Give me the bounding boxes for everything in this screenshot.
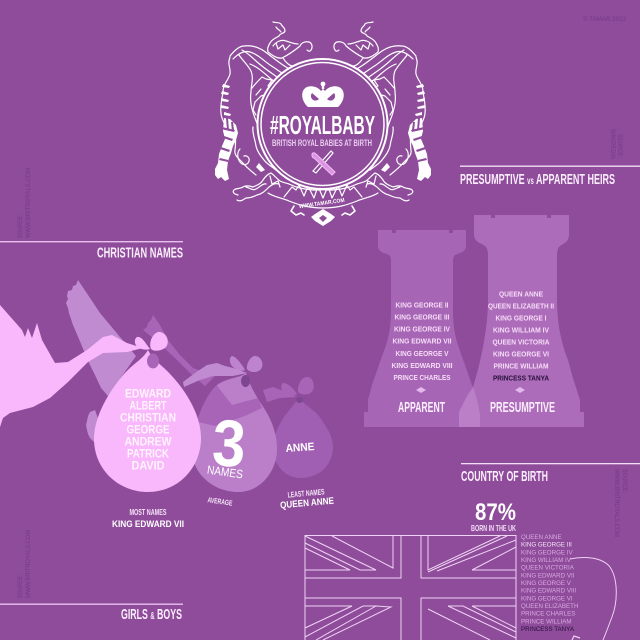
website on ribbon: WWW.TAMAR.COM: [299, 198, 345, 210]
caption: born in the uk: BORN IN THE UK: [471, 523, 517, 533]
list: country of birth names: KING EDWARD VII: [521, 572, 575, 579]
names list: [120, 386, 176, 472]
list: country of birth names: KING GEORGE VI: [521, 595, 573, 602]
heading: girls and boys: GIRLS & BOYS: [121, 606, 182, 623]
source: britroyals top: [17, 168, 32, 238]
crest ornaments, right: [318, 22, 431, 226]
list: country of birth names: [521, 534, 578, 633]
names: presumptive: QUEEN ELIZABETH II: [488, 302, 554, 311]
bag: most names: [94, 332, 201, 492]
list: country of birth names: QUEEN VICTORIA: [521, 565, 575, 572]
list: country of birth names: PRINCE CHARLES: [521, 611, 575, 618]
source: wikipedia: SOURCE:: [616, 134, 623, 158]
names: apparent: [392, 301, 452, 382]
label: king edward vii: KING EDWARD VII: [112, 519, 184, 529]
list: country of birth names: QUEEN ANNE: [521, 534, 562, 541]
subtitle: BRITISH ROYAL BABIES AT BIRTH: [272, 138, 372, 149]
stork: foreground: [0, 305, 143, 427]
names: apparent: PRINCE CHARLES: [394, 373, 450, 382]
source: britroyals right: [613, 469, 628, 537]
label: most names: MOST NAMES: [130, 508, 167, 517]
source: britroyals bottom: SOURCE:: [17, 574, 24, 598]
icon: diamond ornament: [416, 387, 426, 393]
names: apparent: KING GEORGE II: [396, 301, 448, 310]
source: britroyals top: WWW.BRITROYALS.COM: [25, 168, 32, 238]
names: presumptive: QUEEN VICTORIA: [492, 338, 550, 347]
names: apparent: KING GEORGE III: [394, 313, 450, 322]
stork: middle tail: [86, 410, 101, 445]
names: presumptive: KING GEORGE I: [496, 314, 546, 323]
arrow: william iv curve: [570, 558, 616, 640]
rook: presumptive: [459, 215, 584, 427]
icon: diamond ornament: [515, 387, 525, 393]
crest ornaments, left: [215, 22, 328, 226]
headline: #ROYALBABY: [270, 110, 375, 140]
names: presumptive: KING WILLIAM IV: [493, 326, 550, 335]
names: apparent: KING EDWARD VIII: [392, 361, 452, 370]
names: apparent: KING GEORGE V: [396, 349, 449, 358]
names list: GEORGE: [126, 422, 170, 436]
heading: christian names: CHRISTIAN NAMES: [97, 244, 183, 262]
badge rings: [258, 59, 388, 189]
source: britroyals bottom: [17, 530, 32, 598]
source: britroyals bottom: WWW.BRITROYALS.COM: [25, 530, 32, 598]
union jack flag outline: [305, 536, 516, 640]
copyright: © TAMAR 2013: [583, 15, 626, 23]
rook: apparent: [364, 230, 480, 427]
knot: [147, 354, 159, 368]
label: presumptive: PRESUMPTIVE: [490, 399, 555, 416]
names list: ANDREW: [124, 434, 172, 448]
bag: average: [190, 356, 277, 492]
label: anne: ANNE: [285, 441, 315, 455]
icon: crown: [302, 82, 344, 107]
list: country of birth names: PRINCE WILLIAM: [521, 618, 572, 625]
source: britroyals top: SOURCE:: [17, 214, 24, 238]
label: average: AVERAGE: [207, 495, 233, 508]
names: presumptive: QUEEN ANNE: [499, 290, 543, 299]
rook base overlap: [459, 387, 480, 427]
stork: third neck: [263, 387, 297, 402]
heading: country of birth: COUNTRY OF BIRTH: [461, 468, 548, 485]
names: presumptive: KING GEORGE VI: [493, 350, 549, 359]
crest emblem: [215, 22, 431, 226]
label: apparent: APPARENT: [398, 399, 445, 416]
bow: [135, 332, 168, 351]
label: queen anne: QUEEN ANNE: [280, 496, 334, 511]
list: country of birth names: KING GEORGE IV: [521, 549, 573, 556]
names list: ALBERT: [130, 398, 167, 412]
label: least names: LEAST NAMES: [287, 487, 325, 500]
list: country of birth names: QUEEN ELIZABETH: [521, 603, 578, 610]
list: country of birth names: KING GEORGE III: [521, 542, 572, 549]
names: presumptive: PRINCESS TANYA: [493, 374, 549, 383]
knot: [296, 397, 303, 403]
stork: back wing: [143, 315, 215, 386]
big number 3: 3: [211, 405, 248, 481]
names: presumptive: [488, 290, 554, 383]
names: apparent: KING GEORGE IV: [394, 325, 451, 334]
bag: least names: [273, 377, 333, 478]
icon: safety pins: [312, 151, 335, 175]
list: country of birth names: KING GEORGE V: [521, 580, 572, 587]
third stork body: [198, 386, 262, 426]
names: presumptive: PRINCE WILLIAM: [494, 362, 548, 371]
chart: apparent and presumptive rooks: [364, 215, 584, 427]
chart: storks and name bags: [0, 280, 334, 529]
names list: EDWARD: [125, 386, 171, 400]
names list: CHRISTIAN: [120, 410, 176, 424]
list: country of birth names: PRINCESS TANYA: [521, 626, 575, 633]
list: country of birth names: KING WILLIAM IV: [521, 557, 572, 564]
names: apparent: KING EDWARD VII: [392, 337, 452, 346]
knot: [241, 375, 250, 387]
stork: second neck: [183, 363, 247, 387]
source url: wikipedia: WIKIPEDIA: [609, 129, 616, 160]
source: britroyals right: SOURCE:: [621, 469, 628, 493]
names list: PATRICK: [127, 446, 169, 460]
bow: [281, 377, 314, 396]
names list: DAVID: [132, 458, 165, 472]
label: names: NAMES: [206, 463, 244, 481]
lion striped body: [215, 84, 323, 226]
stork: middle wing: [66, 280, 136, 396]
list: country of birth names: KING EDWARD VIII: [521, 588, 576, 595]
bow: [230, 356, 262, 372]
statistic: 87 percent: 87%: [475, 499, 516, 526]
source: britroyals right: WWW.BRITROYALS.COM: [613, 469, 620, 537]
